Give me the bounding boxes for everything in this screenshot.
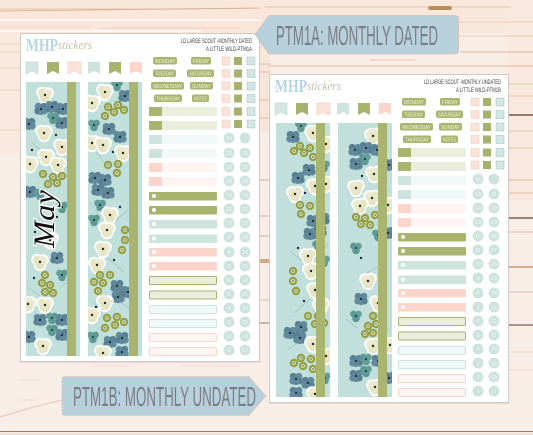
- date circles: 16: [226, 136, 232, 142]
- weekday labels: SUNDAY: [441, 125, 460, 131]
- date circles: 9: [476, 276, 480, 282]
- logo: MHP: [26, 35, 58, 55]
- green band 2: [378, 123, 387, 397]
- date circles: 14: [226, 165, 232, 171]
- date circles: 6: [476, 319, 480, 325]
- date circles: 11: [226, 207, 232, 213]
- green band 2: [129, 82, 138, 356]
- date circles: 19: [491, 361, 497, 367]
- flag stickers: [275, 103, 391, 115]
- date circles: 15: [475, 192, 481, 198]
- date circles: 12: [475, 234, 481, 240]
- sheet: PTM1B monthly undated: [269, 74, 509, 404]
- weekday labels: NOTES: [194, 96, 207, 102]
- date circles: 30: [491, 206, 497, 212]
- date circles: [473, 174, 499, 396]
- date circles: 25: [491, 276, 497, 282]
- date circles: 25: [242, 235, 248, 241]
- weekday labels: FRIDAY: [193, 59, 209, 65]
- floral strip 1: [276, 123, 330, 397]
- weekday labels: MONDAY: [404, 100, 424, 106]
- date circles: 31: [491, 192, 497, 198]
- weekday labels: TUESDAY: [155, 72, 174, 78]
- floral strip 2: [338, 123, 392, 397]
- banner: PTM1B monthly undated: [62, 376, 266, 416]
- date circles: 29: [242, 179, 248, 185]
- date circles: 22: [491, 319, 497, 325]
- date circles: 26: [242, 221, 248, 227]
- date circles: 15: [226, 151, 232, 157]
- floral strip 2: [88, 82, 142, 356]
- weekday labels: SUNDAY: [192, 84, 211, 90]
- weekday labels: SATURDAY: [189, 72, 212, 78]
- dotted bars: [398, 233, 466, 312]
- date circles: 30: [242, 165, 248, 171]
- logo: stickers: [307, 78, 341, 93]
- weekday labels: [151, 57, 214, 102]
- green band 1: [316, 123, 325, 397]
- date circles: 17: [242, 348, 248, 354]
- weekday labels: THURSDAY: [156, 96, 180, 102]
- sheet: PTM1A monthly dated: [19, 33, 260, 362]
- outlined bars: [398, 318, 466, 396]
- date circles: 22: [242, 278, 248, 284]
- sheet title: LD LARGE SCOUT -MONTHLY DATED: [181, 38, 252, 45]
- sheet title: [181, 38, 252, 53]
- date circles: 26: [491, 262, 497, 268]
- date circles: 7: [227, 264, 231, 270]
- date circles: 24: [242, 250, 248, 256]
- date circles: 27: [242, 207, 248, 213]
- date circles: 13: [226, 179, 232, 185]
- weekday labels: THURSDAY: [405, 138, 429, 144]
- date circles: 8: [476, 291, 480, 297]
- green band 1: [67, 82, 76, 356]
- logo: MHP: [275, 76, 307, 96]
- date circles: 1: [476, 389, 480, 395]
- date circles: 23: [491, 305, 497, 311]
- sheet title: A LITTLE WILD-PTM1B: [456, 87, 501, 94]
- weekday labels: NOTES: [443, 138, 456, 144]
- checkbox squares: [222, 57, 255, 128]
- sheet title: A LITTLE WILD-PTM1A: [206, 46, 252, 53]
- date circles: 10: [475, 262, 481, 268]
- logo: stickers: [58, 37, 92, 52]
- date circles: 31: [242, 151, 248, 157]
- banner: PTM1B monthly undated: PTM1B: MONTHLY UNDATED: [73, 381, 256, 412]
- date circles: 5: [476, 333, 480, 339]
- date circles: 17: [491, 389, 497, 395]
- weekday labels: [400, 98, 463, 144]
- date circles: 12: [226, 193, 232, 199]
- weekday labels: FRIDAY: [442, 100, 458, 106]
- date circles: 7: [476, 305, 480, 311]
- weekday labels: WEDNESDAY: [153, 84, 182, 90]
- logo: [26, 35, 92, 55]
- weekday labels: WEDNESDAY: [402, 125, 431, 131]
- date circles: 23: [242, 264, 248, 270]
- date circles: 18: [242, 334, 248, 340]
- dotted bars: [149, 192, 217, 270]
- date circles: 13: [475, 220, 481, 226]
- date circles: [224, 133, 250, 355]
- date circles: 4: [476, 347, 480, 353]
- floral strip 1: [26, 82, 80, 356]
- checkbox squares: [471, 98, 504, 169]
- date circles: 2: [227, 334, 231, 340]
- date circles: 24: [491, 291, 497, 297]
- date circles: 14: [475, 206, 481, 212]
- date circles: 8: [227, 250, 231, 256]
- date circles: 10: [226, 221, 232, 227]
- date circles: 18: [491, 375, 497, 381]
- date circles: 28: [491, 234, 497, 240]
- tabbed bars: [149, 107, 217, 186]
- outlined bars: [150, 276, 216, 356]
- weekday labels: TUESDAY: [404, 112, 423, 118]
- date circles: 29: [491, 220, 497, 226]
- date circles: 21: [242, 292, 248, 298]
- date circles: 19: [242, 320, 248, 326]
- weekday labels: SATURDAY: [438, 112, 461, 118]
- date circles: 11: [475, 248, 481, 254]
- date circles: 1: [227, 348, 231, 354]
- weekday labels: MONDAY: [155, 59, 175, 65]
- date circles: 6: [227, 278, 231, 284]
- banner: PTM1A monthly dated: [255, 16, 458, 54]
- date circles: 9: [227, 235, 231, 241]
- date circles: 2: [476, 375, 480, 381]
- date circles: 28: [242, 193, 248, 199]
- date circles: 20: [491, 347, 497, 353]
- sheet title: [424, 79, 501, 94]
- logo: [275, 76, 341, 96]
- date circles: 4: [227, 306, 231, 312]
- tabbed bars: [398, 148, 466, 227]
- date circles: 27: [491, 248, 497, 254]
- date circles: 21: [491, 333, 497, 339]
- date circles: 3: [227, 320, 231, 326]
- date circles: 3: [476, 361, 480, 367]
- month script: May: May: [28, 189, 61, 249]
- date circles: 20: [242, 306, 248, 312]
- date circles: 16: [475, 177, 481, 183]
- date circles: 5: [227, 292, 231, 298]
- flag stickers: [26, 62, 142, 74]
